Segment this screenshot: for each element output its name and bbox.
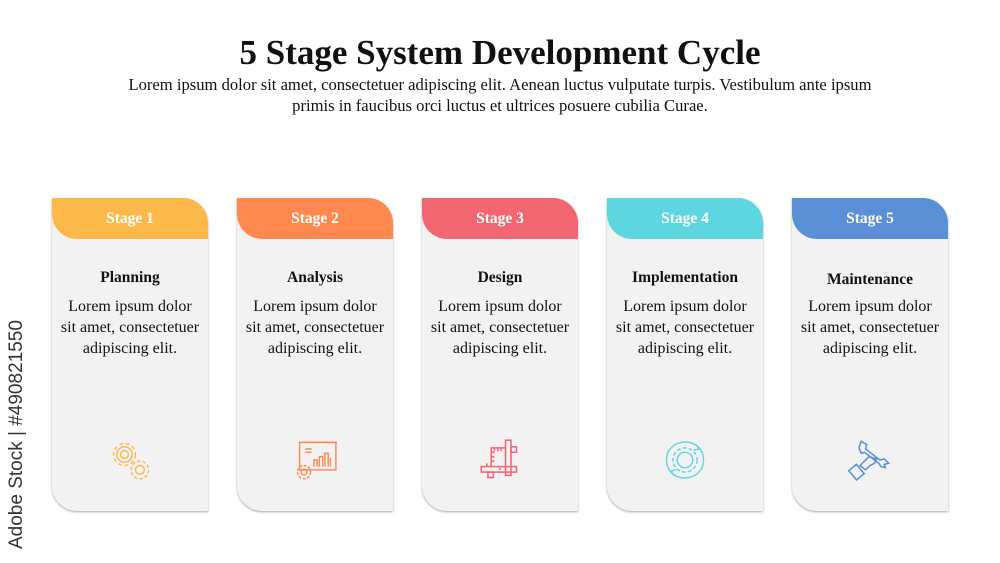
panel: stage 2	[237, 198, 393, 511]
panel: stage 4	[607, 198, 763, 511]
header: stage 1: Stage 1	[106, 210, 154, 227]
text block	[246, 298, 384, 357]
watermark side text: Adobe Stock | #490821550	[6, 320, 27, 549]
subtitle: primis in faucibus orci luctus et ultrices posuere cubilia Curae.	[292, 96, 708, 115]
text block: adipiscing elit.	[453, 340, 547, 357]
text block: sit amet, consectetuer	[431, 319, 569, 336]
panel: stage 3	[422, 198, 578, 511]
heading: maintenance: Maintenance	[827, 271, 913, 288]
text block: Lorem ipsum dolor	[438, 298, 562, 315]
text block: sit amet, consectetuer	[616, 319, 754, 336]
icon: gears	[112, 442, 150, 480]
text block	[61, 298, 199, 357]
icon: rulers	[480, 439, 518, 478]
heading: design: Design	[478, 269, 522, 286]
text block: sit amet, consectetuer	[246, 319, 384, 336]
subtitle	[128, 75, 872, 115]
text block: Lorem ipsum dolor	[68, 298, 192, 315]
text block	[616, 298, 754, 357]
text block: adipiscing elit.	[638, 340, 732, 357]
header: stage 1	[52, 198, 208, 239]
header: stage 5	[792, 198, 948, 239]
text block: sit amet, consectetuer	[61, 319, 199, 336]
panel: stage 5	[792, 198, 948, 511]
header: stage 5: Stage 5	[846, 210, 894, 227]
icon: presentation chart	[296, 442, 337, 480]
header: stage 4	[607, 198, 763, 239]
text block: adipiscing elit.	[268, 340, 362, 357]
text block: Lorem ipsum dolor	[808, 298, 932, 315]
title: 5 Stage System Development Cycle	[239, 33, 760, 72]
text block: Lorem ipsum dolor	[623, 298, 747, 315]
heading: analysis: Analysis	[287, 269, 343, 286]
header: stage 3: Stage 3	[476, 210, 524, 227]
text block	[431, 298, 569, 357]
icon: wrench hand	[848, 440, 890, 481]
header: stage 2	[237, 198, 393, 239]
header: stage 3	[422, 198, 578, 239]
header: stage 4: Stage 4	[661, 210, 709, 227]
heading: planning: Planning	[100, 269, 160, 286]
text block: sit amet, consectetuer	[801, 319, 939, 336]
heading: implementation: Implementation	[632, 269, 738, 286]
text block: Lorem ipsum dolor	[253, 298, 377, 315]
header: stage 2: Stage 2	[291, 210, 339, 227]
text block: adipiscing elit.	[823, 340, 917, 357]
icon: gear cycle	[666, 441, 704, 479]
subtitle: Lorem ipsum dolor sit amet, consectetuer adipiscing elit. Aenean luctus vulputate turpis. Vestibulum ante ipsum	[128, 75, 872, 94]
text block: adipiscing elit.	[83, 340, 177, 357]
text block	[801, 298, 939, 357]
panel: stage 1	[52, 198, 208, 511]
